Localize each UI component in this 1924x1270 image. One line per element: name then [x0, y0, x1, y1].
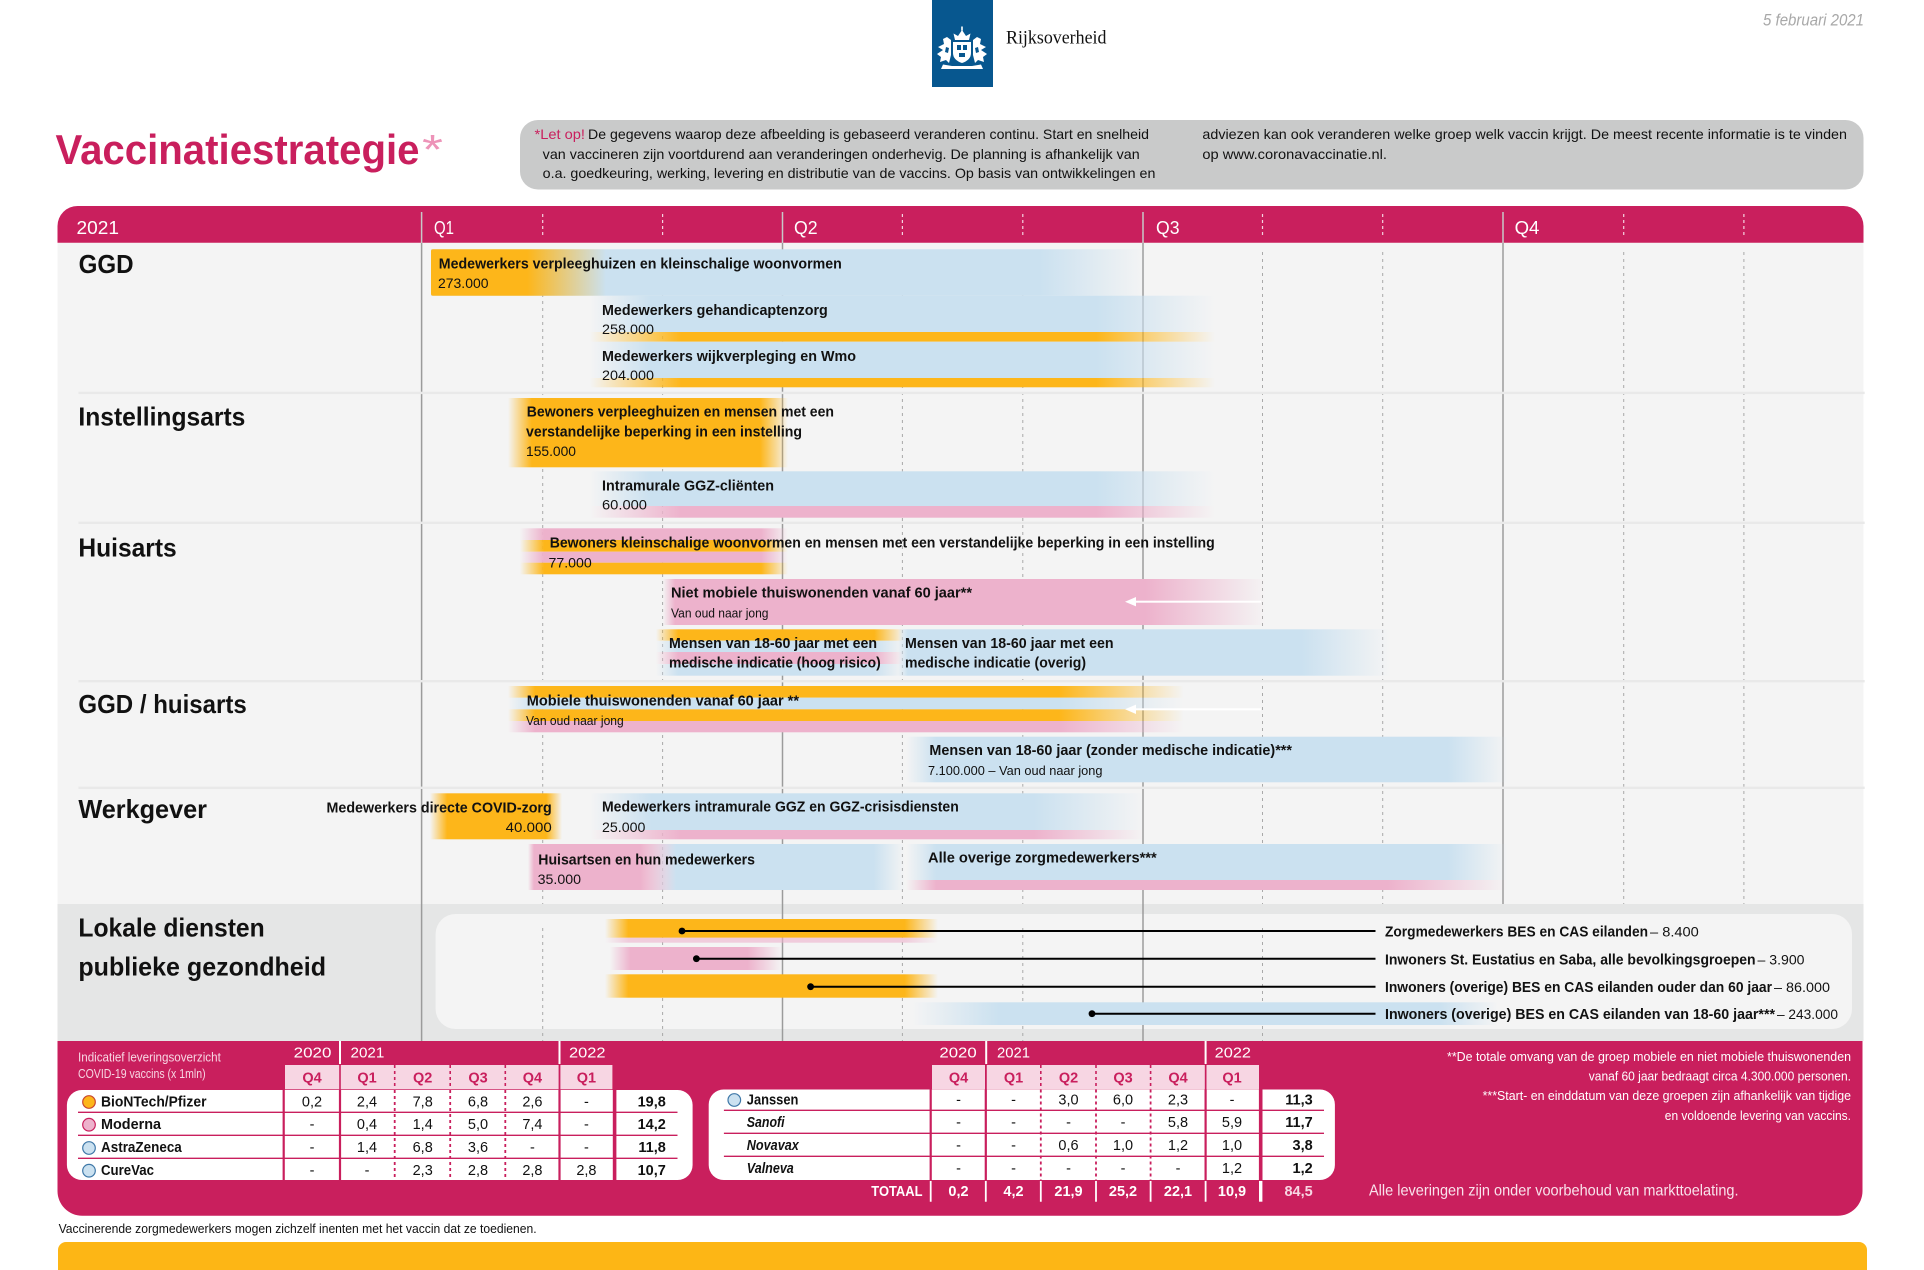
table: vaccins links: 2022 — [569, 1046, 606, 1062]
bar: zorgmedewerkers BES en CAS: Zorgmedewerkers BES en CAS eilanden — [1385, 924, 1648, 941]
delivery values right: 5,8 — [1168, 1115, 1188, 1131]
delivery values right: - — [1121, 1161, 1126, 1177]
table: vaccins rechts: Q4 — [1168, 1071, 1188, 1087]
bar: niet mobiele thuiswonenden: Niet mobiele thuiswonenden vanaf 60 jaar** — [671, 584, 972, 601]
bar: bewoners verpleeghuizen: 155.000 — [526, 443, 576, 459]
bar: inwoners St. Eustatius en Saba — [610, 947, 1805, 970]
vaccine names: AstraZeneca — [101, 1140, 183, 1156]
header band: Q4 — [1515, 218, 1539, 238]
delivery values left — [302, 1095, 666, 1179]
delivery values left: 19,8 — [638, 1095, 666, 1111]
delivery values left: 5,0 — [468, 1117, 488, 1133]
bar: medewerkers verpleeghuizen: 273.000 — [438, 275, 489, 291]
totals row: 22,1 — [1164, 1184, 1192, 1200]
bar: inwoners St. Eustatius en Saba: Inwoners St. Eustatius en Saba, alle bevolkingsgroepen — [1385, 952, 1756, 969]
heading Werkgever: Werkgever — [78, 794, 207, 824]
bar: medewerkers directe COVID-zorg: 40.000 — [506, 819, 552, 835]
table: vaccins links: Q1 — [357, 1071, 377, 1087]
bar: mensen 18-60 hoog risico: Mensen van 18-60 jaar met een — [669, 635, 877, 652]
delivery values left: - — [584, 1140, 589, 1156]
delivery values left: 0,2 — [302, 1095, 322, 1111]
delivery values left: 2,8 — [576, 1163, 596, 1179]
vaccine names right — [747, 1093, 800, 1177]
section: Huisarts — [78, 528, 1390, 676]
footnotes: en voldoende levering van vaccins. — [1665, 1108, 1851, 1123]
delivery values left: - — [584, 1117, 589, 1133]
callout text column 1: *Let op! — [534, 126, 585, 142]
bar: medewerkers gehandicaptenzorg — [590, 296, 1215, 342]
totals row: 4,2 — [1003, 1184, 1024, 1200]
bar: niet mobiele thuiswonenden: Van oud naar jong — [671, 607, 769, 621]
footnotes: **De totale omvang van de groep mobiele en niet mobiele thuiswonenden — [1447, 1049, 1851, 1064]
bar: huisartsen en hun medewerkers: Huisartsen en hun medewerkers — [538, 851, 755, 868]
bar: inwoners BES en CAS 18-60 — [912, 1002, 1838, 1025]
section: GGD — [79, 249, 1215, 387]
vaccine names right: Sanofi — [747, 1115, 785, 1131]
section: Werkgever — [78, 793, 1508, 890]
delivery values left: - — [584, 1095, 589, 1111]
header band: 2021 — [76, 218, 119, 238]
callout text column 2 — [1202, 126, 1847, 162]
bar: inwoners BES en CAS ouder dan 60: Inwoners (overige) BES en CAS eilanden ouder dan 60 jaar — [1385, 979, 1772, 996]
bar: medewerkers verpleeghuizen: Medewerkers verpleeghuizen en kleinschalige woonvormen — [439, 256, 842, 273]
delivery values left: - — [310, 1117, 315, 1133]
delivery values left: - — [530, 1140, 535, 1156]
totals row: 25,2 — [1109, 1184, 1137, 1200]
bar: mensen 18-60 overig: medische indicatie (overig) — [905, 655, 1086, 672]
table: vaccins rechts: Q2 — [1059, 1071, 1078, 1087]
bar: medewerkers wijkverpleging: Medewerkers wijkverpleging en Wmo — [602, 348, 856, 365]
header band: Q3 — [1156, 218, 1180, 238]
delivery values left: - — [310, 1140, 315, 1156]
logo: Rijksoverheid — [932, 0, 1107, 87]
vaccine names: BioNTech/Pfizer — [101, 1095, 207, 1111]
vaccine names right: Novavax — [747, 1138, 800, 1154]
legend dot: Moderna — [83, 1118, 95, 1131]
delivery values left: 2,8 — [522, 1163, 542, 1179]
table caption — [78, 1051, 221, 1081]
delivery values left: 2,3 — [413, 1163, 433, 1179]
legend dot: Janssen — [728, 1094, 741, 1106]
callout: let op — [520, 120, 1864, 190]
bar: medewerkers gehandicaptenzorg: Medewerkers gehandicaptenzorg — [602, 302, 828, 319]
delivery values right: - — [1011, 1161, 1016, 1177]
delivery values right: - — [1066, 1115, 1071, 1131]
delivery values left: 11,8 — [638, 1140, 666, 1156]
delivery values right: 3,8 — [1293, 1138, 1313, 1154]
delivery values right: - — [1011, 1093, 1016, 1109]
lokale diensten inner panel — [436, 914, 1852, 1029]
table: vaccins rechts: Q1 — [1004, 1071, 1023, 1087]
totals row: 10,9 — [1218, 1184, 1246, 1200]
footnotes: vanaf 60 jaar bedraagt circa 4.300.000 personen. — [1589, 1069, 1851, 1084]
section: Instellingsarts — [78, 398, 1215, 518]
heading GGD / huisarts: GGD / huisarts — [78, 689, 247, 719]
table: vaccins links: Q1 — [577, 1071, 596, 1087]
delivery values right: 2,3 — [1168, 1093, 1188, 1109]
bar: medewerkers gehandicaptenzorg: 258.000 — [602, 321, 654, 337]
bar: mensen 18-60 zonder indicatie: Mensen van 18-60 jaar (zonder medische indicatie)*** — [929, 742, 1292, 759]
bar: zorgmedewerkers BES en CAS: – 8.400 — [1650, 924, 1699, 940]
totals row: 21,9 — [1054, 1184, 1083, 1200]
delivery values right: 1,2 — [1168, 1138, 1188, 1154]
heading Lokale diensten: publieke gezondheid — [78, 952, 326, 982]
table: vaccins rechts: Q1 — [1222, 1071, 1242, 1087]
timeline background — [58, 242, 1864, 904]
bar: bewoners verpleeghuizen: verstandelijke beperking in een instelling — [526, 424, 802, 441]
table: vaccins links — [67, 1041, 693, 1180]
delivery values left: - — [365, 1163, 370, 1179]
delivery values right: 3,0 — [1058, 1093, 1079, 1109]
callout text column 2: op www.coronavaccinatie.nl. — [1202, 146, 1387, 162]
delivery values right: 6,0 — [1113, 1093, 1133, 1109]
vaccine names: CureVac — [101, 1163, 154, 1179]
arrow: mobiele thuiswonenden — [1125, 705, 1261, 714]
delivery values right: 1,0 — [1222, 1138, 1242, 1154]
bar: mensen 18-60 zonder indicatie: 7.100.000 – Van oud naar jong — [928, 764, 1103, 778]
footer note: Vaccinerende zorgmedewerkers mogen zichzelf inenten met het vaccin dat ze toedienen. — [59, 1222, 537, 1236]
header band — [58, 206, 1864, 243]
arrow: niet mobiele thuiswonenden — [1125, 597, 1261, 606]
totals row: 0,2 — [948, 1184, 969, 1200]
bar: bewoners kleinschalige woonvormen — [520, 528, 1215, 574]
date: 5 februari 2021 — [1763, 10, 1864, 30]
delivery values right: - — [956, 1138, 961, 1154]
table: vaccins rechts — [709, 1041, 1335, 1202]
bar: medewerkers wijkverpleging — [590, 342, 1215, 387]
bar: bewoners kleinschalige woonvormen: Bewoners kleinschalige woonvormen en mensen met een verstandelijke beperking in een instelling — [550, 535, 1215, 552]
delivery values left: - — [310, 1163, 315, 1179]
bar: medewerkers verpleeghuizen — [431, 249, 1146, 296]
bar: inwoners BES en CAS 18-60: Inwoners (overige) BES en CAS eilanden van 18-60 jaar*** — [1385, 1006, 1775, 1023]
callout text column 1 — [534, 126, 1155, 181]
legend dot: AstraZeneca — [83, 1142, 95, 1154]
bar: inwoners BES en CAS ouder dan 60 — [605, 974, 1830, 998]
delivery values left: 3,6 — [468, 1140, 488, 1156]
bar: zorgmedewerkers BES en CAS — [605, 919, 1699, 943]
bar: mensen 18-60 hoog risico: medische indicatie (hoog risico) — [669, 655, 881, 672]
footnotes — [1447, 1049, 1851, 1123]
section: Lokale diensten publieke gezondheid — [78, 913, 1838, 1025]
bar: huisartsen en hun medewerkers — [528, 844, 905, 890]
table: vaccins links: Q2 — [413, 1071, 432, 1087]
delivery values right: 1,2 — [1293, 1161, 1313, 1177]
bar: mobiele thuiswonenden: Van oud naar jong — [526, 714, 624, 728]
vaccine names right: Valneva — [747, 1161, 794, 1177]
table: vaccins links: Q4 — [523, 1071, 542, 1087]
delivery values right: - — [1176, 1161, 1181, 1177]
delivery values right: - — [956, 1093, 961, 1109]
table: vaccins rechts: 2022 — [1215, 1046, 1251, 1062]
bar: inwoners BES en CAS ouder dan 60: – 86.000 — [1774, 979, 1830, 995]
delivery values left: 1,4 — [413, 1117, 433, 1133]
logo wordmark: Rijksoverheid — [1006, 28, 1107, 48]
table: vaccins rechts: 2021 — [997, 1046, 1030, 1062]
delivery values right: 0,6 — [1058, 1138, 1079, 1154]
delivery values right: - — [1011, 1115, 1016, 1131]
delivery values left: 7,8 — [413, 1095, 433, 1111]
lokale diensten background — [58, 904, 1864, 1041]
bar: niet mobiele thuiswonenden — [663, 579, 1266, 625]
vaccine names: Moderna — [101, 1117, 162, 1133]
table: vaccins rechts: Q3 — [1113, 1071, 1133, 1087]
heading Lokale diensten — [78, 913, 326, 982]
delivery values left: 6,8 — [468, 1095, 488, 1111]
title: * — [422, 126, 443, 173]
bar: alle overige zorgmedewerkers — [906, 844, 1508, 890]
totals row: TOTAAL — [871, 1184, 923, 1200]
bar: alle overige zorgmedewerkers: Alle overige zorgmedewerkers*** — [928, 850, 1157, 867]
panel: leveringsoverzicht — [57, 1041, 1862, 1216]
table: vaccins links: Q4 — [302, 1071, 322, 1087]
delivery values left: 10,7 — [638, 1163, 666, 1179]
bar: inwoners St. Eustatius en Saba: – 3.900 — [1758, 952, 1805, 968]
delivery values right: - — [1066, 1161, 1071, 1177]
bar: bewoners verpleeghuizen: Bewoners verpleeghuizen en mensen met een — [527, 404, 834, 421]
bar: medewerkers intramurale GGZ — [590, 793, 1145, 839]
callout text column 1: De gegevens waarop deze afbeelding is gebaseerd veranderen continu. Start en snelheid — [588, 126, 1149, 142]
totals row: 84,5 — [1284, 1184, 1313, 1200]
heading Instellingsarts: Instellingsarts — [78, 402, 245, 432]
delivery values right: - — [1230, 1093, 1235, 1109]
yellow footer bar — [58, 1242, 1867, 1270]
totals row — [871, 1181, 1313, 1202]
bar: medewerkers intramurale GGZ: Medewerkers intramurale GGZ en GGZ-crisisdiensten — [602, 799, 959, 816]
section: GGD / huisarts — [78, 686, 1508, 782]
panel: timeline — [58, 206, 1865, 1041]
bar: intramurale GGZ: Intramurale GGZ-cliënten — [602, 478, 774, 495]
delivery values left: 2,8 — [468, 1163, 488, 1179]
bar: huisartsen en hun medewerkers: 35.000 — [538, 871, 581, 887]
delivery values right — [956, 1093, 1313, 1177]
delivery values left: 7,4 — [522, 1117, 542, 1133]
bar: mobiele thuiswonenden: Mobiele thuiswonenden vanaf 60 jaar ** — [527, 693, 799, 710]
bar: intramurale GGZ: 60.000 — [602, 496, 647, 512]
bar: bewoners kleinschalige woonvormen: 77.000 — [548, 554, 592, 570]
note: markttoelating: Alle leveringen zijn onder voorbehoud van markttoelating. — [1369, 1183, 1738, 1200]
bar: medewerkers directe COVID-zorg: Medewerkers directe COVID-zorg — [326, 799, 552, 816]
table: vaccins rechts: Q4 — [949, 1071, 968, 1087]
delivery values right: 1,2 — [1222, 1161, 1242, 1177]
table: vaccins rechts: 2020 — [939, 1046, 977, 1062]
bar: mensen 18-60 hoog risico — [656, 629, 904, 676]
bar: bewoners verpleeghuizen — [508, 398, 834, 467]
delivery values right: - — [956, 1115, 961, 1131]
table caption: COVID-19 vaccins (x 1mln) — [78, 1067, 206, 1081]
footnotes: ***Start- en einddatum van deze groepen zijn afhankelijk van tijdige — [1483, 1088, 1851, 1103]
bar: medewerkers intramurale GGZ: 25.000 — [602, 819, 646, 835]
delivery values left: 1,4 — [357, 1140, 377, 1156]
delivery values right: 1,0 — [1113, 1138, 1133, 1154]
header band: Q2 — [794, 218, 818, 238]
bar: mobiele thuiswonenden — [508, 686, 1261, 732]
bar: medewerkers wijkverpleging: 204.000 — [602, 367, 654, 383]
delivery values right: - — [956, 1161, 961, 1177]
delivery values left: 2,6 — [522, 1095, 542, 1111]
bar: mensen 18-60 zonder indicatie — [906, 737, 1508, 782]
logo ribbon with crest — [932, 0, 993, 87]
callout text column 1: o.a. goedkeuring, werking, levering en distributie van de vaccins. Op basis van ontwikkelingen en — [543, 165, 1155, 181]
delivery values right: 11,7 — [1285, 1115, 1313, 1131]
delivery values left: 6,8 — [413, 1140, 433, 1156]
delivery values left: 0,4 — [357, 1117, 377, 1133]
callout text column 1: van vaccineren zijn voortdurend aan veranderingen onderhevig. De planning is afhankelijk van — [543, 146, 1140, 162]
bar: inwoners BES en CAS 18-60: – 243.000 — [1777, 1006, 1838, 1022]
delivery values right: - — [1121, 1115, 1126, 1131]
heading Lokale diensten: Lokale diensten — [78, 913, 265, 943]
delivery values left: 2,4 — [357, 1095, 377, 1111]
header band: Q1 — [434, 218, 454, 238]
bar: mensen 18-60 overig: Mensen van 18-60 jaar met een — [905, 635, 1114, 652]
title: Vaccinatiestrategie — [56, 126, 420, 173]
table: vaccins links: 2020 — [294, 1046, 331, 1062]
table: vaccins links: Q3 — [468, 1071, 488, 1087]
heading GGD: GGD — [79, 249, 134, 279]
heading Huisarts: Huisarts — [78, 533, 177, 563]
delivery values right: 5,9 — [1222, 1115, 1242, 1131]
legend dot: CureVac — [83, 1164, 95, 1177]
legend dot: BioNTech/Pfizer — [83, 1096, 95, 1108]
vaccine names right: Janssen — [747, 1093, 798, 1109]
bar: mensen 18-60 overig — [898, 629, 1390, 676]
bar: medewerkers directe COVID-zorg — [326, 793, 562, 839]
vaccine names — [101, 1095, 207, 1179]
table: vaccins links: 2021 — [350, 1046, 384, 1062]
bar: intramurale GGZ — [590, 471, 1215, 518]
delivery values right: - — [1011, 1138, 1016, 1154]
delivery values left: 14,2 — [638, 1117, 666, 1133]
delivery values right: 11,3 — [1285, 1093, 1313, 1109]
table caption: Indicatief leveringsoverzicht — [78, 1051, 221, 1065]
callout text column 2: adviezen kan ook veranderen welke groep welk vaccin krijgt. De meest recente informatie is te vinden — [1202, 126, 1847, 142]
